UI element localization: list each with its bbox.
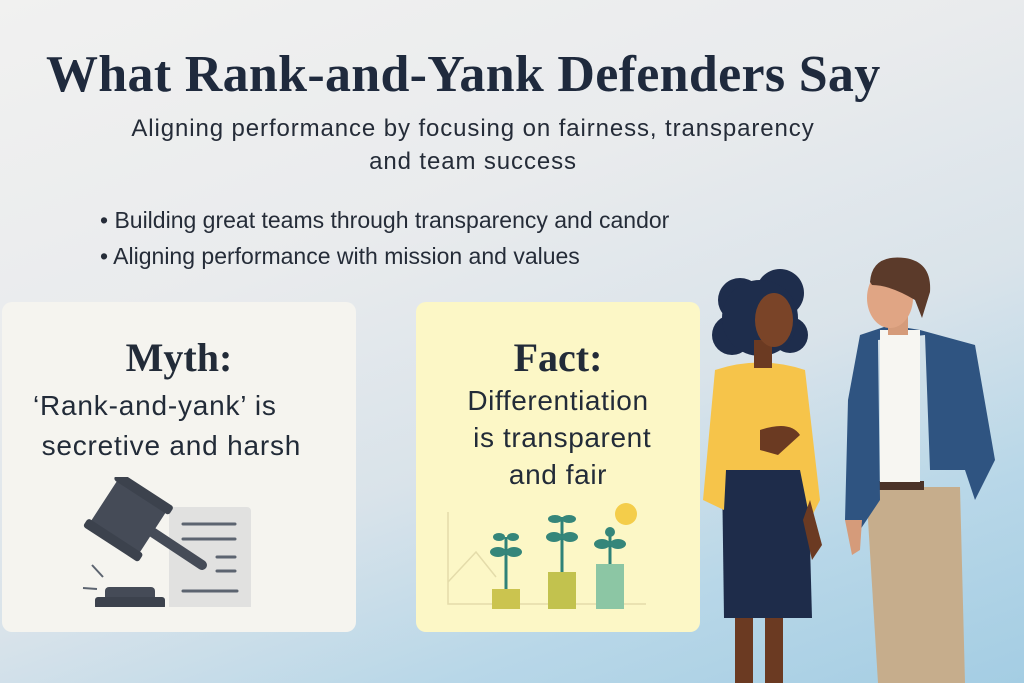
icon: gavel and document: [82, 477, 251, 607]
title: What Rank-and-Yank Defenders Say: [46, 46, 881, 103]
illustration: two people talking: [703, 258, 995, 683]
icon: growing plants chart: [447, 503, 646, 609]
man: [845, 258, 995, 683]
panel: myth: [2, 302, 356, 632]
myth text: [33, 390, 301, 461]
myth text: ‘Rank-and-yank’ is: [33, 390, 277, 421]
bullet list: [100, 207, 669, 269]
subtitle: and team success: [369, 148, 577, 175]
subtitle: Aligning performance by focusing on fairness, transparency: [131, 115, 815, 142]
fact text: and fair: [509, 459, 607, 490]
myth text: secretive and harsh: [42, 430, 301, 461]
myth heading: Myth:: [126, 335, 232, 380]
fact heading: Fact:: [514, 335, 602, 380]
fact text: [467, 385, 651, 490]
panel: fact: [416, 302, 700, 632]
fact text: Differentiation: [467, 385, 649, 416]
fact text: is transparent: [473, 422, 651, 453]
bullet list: • Aligning performance with mission and values: [100, 243, 580, 269]
woman: [703, 269, 822, 683]
subtitle: [131, 115, 815, 175]
bullet list: • Building great teams through transparency and candor: [100, 207, 669, 233]
